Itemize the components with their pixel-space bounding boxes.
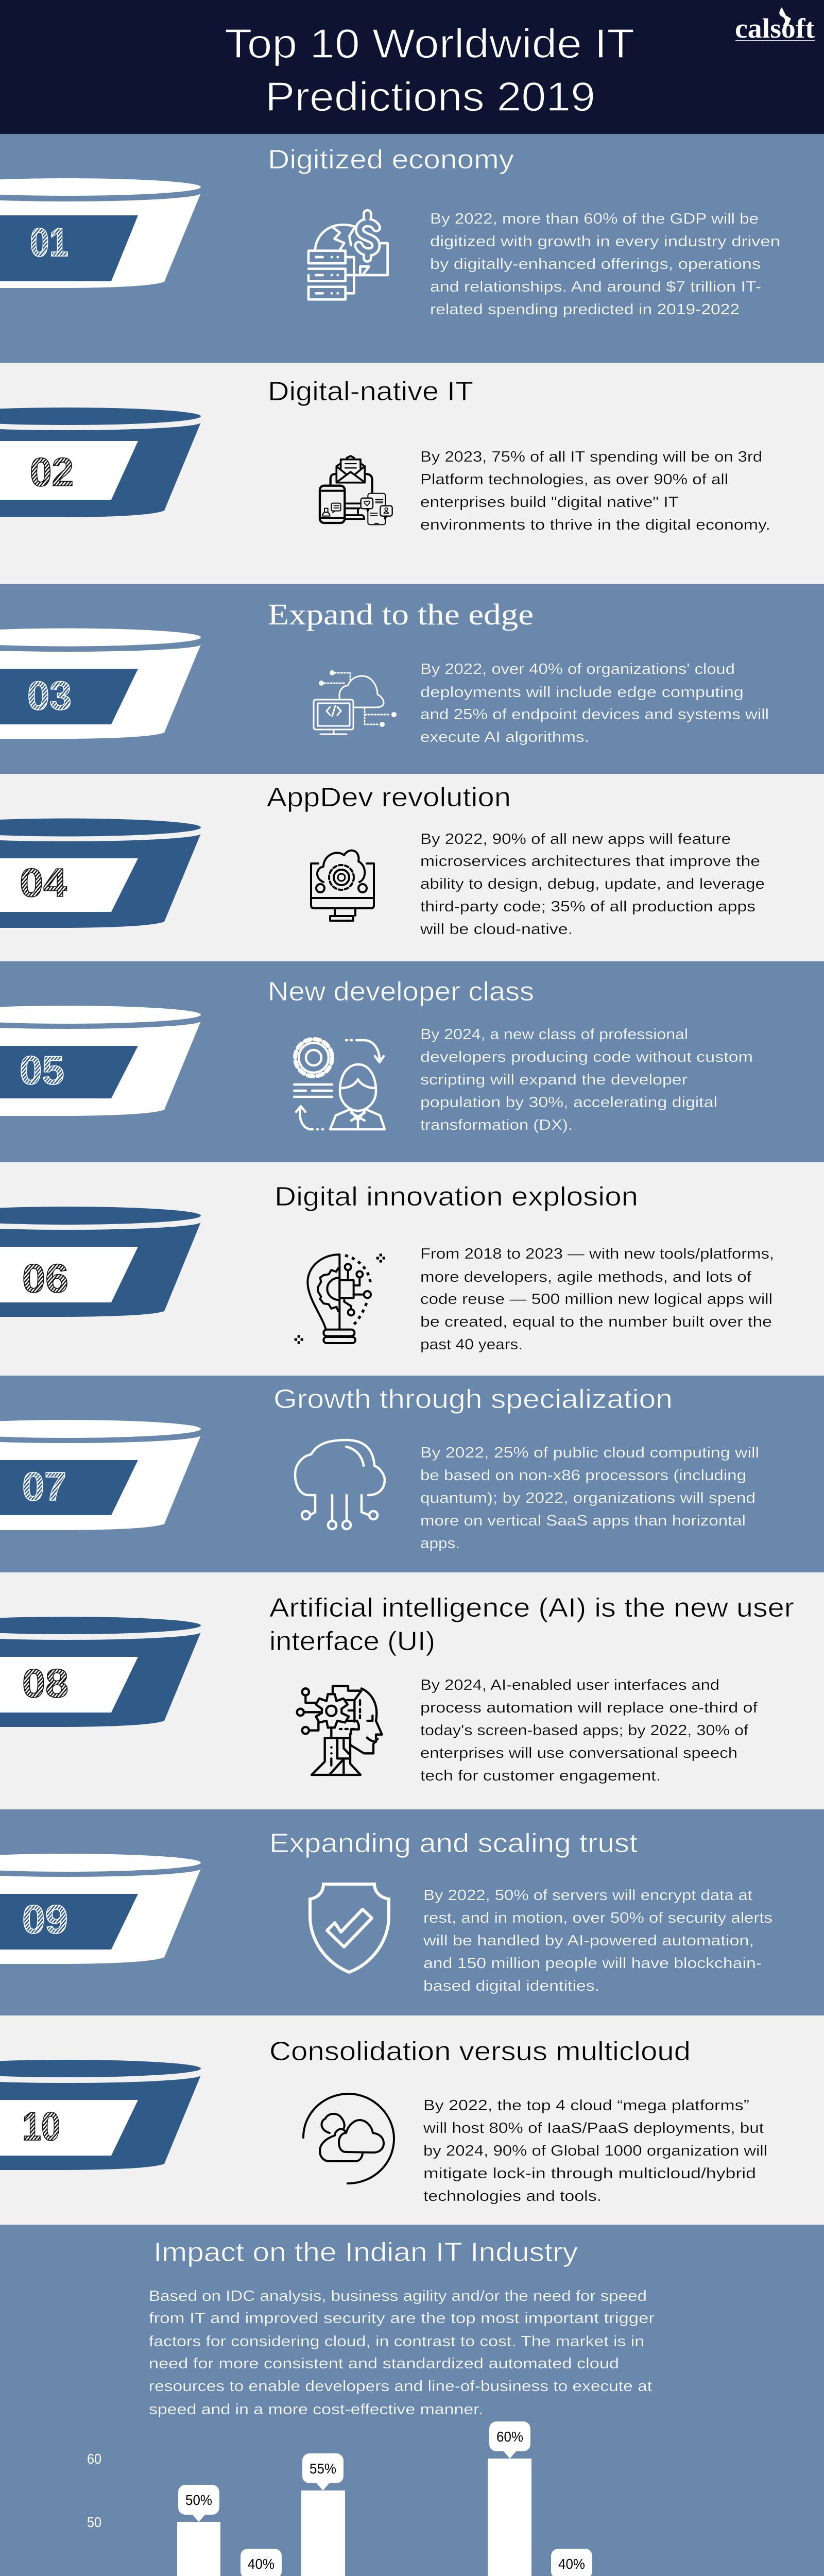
panel: 05 new developer class xyxy=(0,961,824,1162)
body text xyxy=(420,1026,753,1133)
heading: Expand to the edge xyxy=(268,598,534,631)
body text: By 2024, AI-enabled user interfaces and xyxy=(420,1677,719,1693)
body text: will be cloud-native. xyxy=(420,921,573,938)
body text: rest, and in motion, over 50% of security alerts xyxy=(423,1910,772,1926)
number bucket 10: 10 xyxy=(22,2104,60,2149)
body text xyxy=(420,1445,759,1552)
number bucket 04 xyxy=(0,818,201,928)
body text: process automation will replace one-third of xyxy=(420,1700,758,1716)
panel: 04 appdev revolution xyxy=(0,774,824,961)
logo: calsoft: calsoft xyxy=(735,13,815,44)
body text: third-party code; 35% of all production apps xyxy=(420,899,756,915)
body text: By 2022, 90% of all new apps will feature xyxy=(420,831,731,848)
heading: Artificial intelligence (AI) is the new user xyxy=(269,1593,794,1623)
body text: By 2022, 50% of servers will encrypt data at xyxy=(423,1887,752,1904)
body text: factors for considering cloud, in contrast to cost. The market is in xyxy=(149,2333,644,2350)
panel: 10 consolidation versus multicloud xyxy=(0,2015,824,2225)
body text: By 2022, over 40% of organizations' cloud xyxy=(420,661,735,677)
body text: need for more consistent and standardized automated cloud xyxy=(149,2355,619,2372)
body text xyxy=(149,2288,655,2418)
body text: technologies and tools. xyxy=(423,2188,602,2205)
panel: 09 expanding and scaling trust xyxy=(0,1809,824,2015)
body text: apps. xyxy=(420,1535,460,1552)
body text: ability to design, debug, update, and leverage xyxy=(420,876,765,892)
body text: scripting will expand the developer xyxy=(420,1072,688,1088)
number bucket 05 xyxy=(0,1006,201,1116)
bar: 55% xyxy=(301,2453,345,2576)
heading: Impact on the Indian IT Industry xyxy=(153,2238,578,2267)
heading: Expanding and scaling trust xyxy=(269,1828,638,1858)
icon: cloud network xyxy=(295,1440,385,1529)
icon: orbiting clouds xyxy=(303,2094,394,2183)
heading: Digital-native IT xyxy=(268,377,473,406)
body text: and 25% of endpoint devices and systems will xyxy=(420,706,769,723)
y axis labels: 50 xyxy=(87,2514,101,2530)
panel: 07 growth through specialization xyxy=(0,1376,824,1572)
bar: 40% xyxy=(550,2549,594,2576)
y axis labels: 60 xyxy=(87,2451,101,2467)
number bucket 04: 04 xyxy=(20,860,67,905)
body text: microservices architectures that improve the xyxy=(420,853,760,870)
body text: be based on non-x86 processors (including xyxy=(420,1467,746,1484)
icon: shield with check xyxy=(310,1884,389,1972)
y axis labels xyxy=(87,2451,101,2576)
number bucket 08 xyxy=(0,1617,201,1727)
body text: and relationships. And around $7 trillion IT- xyxy=(430,279,761,295)
body text: speed and in a more cost-effective manner. xyxy=(149,2401,483,2418)
body text: developers producing code without custom xyxy=(420,1049,753,1065)
icon: AI head with gear xyxy=(297,1686,382,1775)
bar: 60% xyxy=(488,2421,531,2576)
bar chart xyxy=(87,2421,730,2576)
bar: 40%: 40% xyxy=(558,2556,585,2572)
icon: digital light bulb xyxy=(295,1253,385,1344)
title xyxy=(225,21,634,120)
bar: 55%: 55% xyxy=(310,2461,336,2477)
body text xyxy=(420,831,765,938)
body text xyxy=(420,661,769,745)
body text: resources to enable developers and line-of-business to execute at xyxy=(149,2378,652,2395)
heading: Digitized economy xyxy=(268,145,514,175)
number bucket 06 xyxy=(0,1207,201,1317)
heading: Consolidation versus multicloud xyxy=(269,2037,691,2066)
number bucket 01: 01 xyxy=(30,219,68,265)
body text xyxy=(420,449,770,533)
body text: By 2022, the top 4 cloud “mega platforms” xyxy=(423,2097,749,2114)
body text: code reuse — 500 million new logical apps will xyxy=(420,1291,772,1308)
body text: past 40 years. xyxy=(420,1336,523,1353)
number bucket 06: 06 xyxy=(22,1256,68,1301)
body text xyxy=(423,2097,767,2205)
body text: deployments will include edge computing xyxy=(420,684,744,701)
heading: Digital innovation explosion xyxy=(274,1182,638,1212)
bar: 50%: 50% xyxy=(185,2492,212,2508)
title: Predictions 2019 xyxy=(265,74,595,120)
icon: edge cloud monitor xyxy=(314,670,397,734)
panel: 02 digital-native IT xyxy=(0,363,824,584)
body text: and 150 million people will have blockchain- xyxy=(423,1955,762,1972)
body text xyxy=(420,1246,774,1353)
number bucket 01 xyxy=(0,178,201,288)
number bucket 02 xyxy=(0,408,201,517)
body text: will host 80% of IaaS/PaaS deployments, but xyxy=(423,2120,764,2137)
bar: 40%: 40% xyxy=(248,2556,274,2572)
body text: quantum); by 2022, organizations will spend xyxy=(420,1490,756,1506)
bar: 50% xyxy=(177,2485,220,2576)
body text: By 2024, a new class of professional xyxy=(420,1026,688,1043)
number bucket 03: 03 xyxy=(27,673,72,718)
number bucket 07 xyxy=(0,1420,201,1530)
body text: By 2023, 75% of all IT spending will be on 3rd xyxy=(420,449,762,465)
bar: 60%: 60% xyxy=(496,2429,523,2445)
number bucket 08: 08 xyxy=(22,1660,68,1706)
number bucket 07: 07 xyxy=(22,1464,66,1509)
number bucket 02: 02 xyxy=(30,449,74,495)
heading: New developer class xyxy=(268,977,534,1007)
body text: will be handled by AI-powered automation, xyxy=(423,1933,754,1949)
body text: enterprises build "digital native" IT xyxy=(420,494,679,511)
body text: by digitally-enhanced offerings, operations xyxy=(430,256,761,273)
heading: Growth through specialization xyxy=(273,1384,673,1414)
icon: cloud gear monitor xyxy=(311,851,374,921)
body text xyxy=(420,1677,758,1784)
body text: By 2022, 25% of public cloud computing will xyxy=(420,1445,759,1461)
heading: AppDev revolution xyxy=(267,783,511,812)
body text: by 2024, 90% of Global 1000 organization will xyxy=(423,2143,767,2159)
number bucket 09: 09 xyxy=(22,1896,68,1942)
title: Top 10 Worldwide IT xyxy=(225,21,634,66)
panel: 08 artificial intelligence xyxy=(0,1572,824,1809)
body text: environments to thrive in the digital economy. xyxy=(420,517,770,533)
body text: population by 30%, accelerating digital xyxy=(420,1094,717,1111)
body text: today's screen-based apps; by 2022, 30% of xyxy=(420,1722,749,1739)
bar: 40% xyxy=(239,2549,283,2576)
panel: 06 digital innovation explosion xyxy=(0,1162,824,1376)
number bucket 09 xyxy=(0,1854,201,1964)
number bucket 05: 05 xyxy=(20,1047,64,1093)
body text: From 2018 to 2023 — with new tools/platforms, xyxy=(420,1246,774,1262)
icon: globe dollar servers xyxy=(308,214,388,299)
body text: be created, equal to the number built over the xyxy=(420,1314,772,1330)
heading xyxy=(269,1593,794,1656)
body text: enterprises will use conversational speech xyxy=(420,1745,737,1761)
body text: from IT and improved security are the top most important trigger xyxy=(149,2310,655,2327)
body text: mitigate lock-in through multicloud/hybrid xyxy=(423,2165,756,2182)
body text: transformation (DX). xyxy=(420,1117,573,1133)
body text: tech for customer engagement. xyxy=(420,1768,661,1784)
body text: digitized with growth in every industry driven xyxy=(430,233,780,250)
number bucket 03 xyxy=(0,629,201,739)
body text: execute AI algorithms. xyxy=(420,729,589,745)
header banner xyxy=(0,0,824,134)
heading: interface (UI) xyxy=(269,1626,435,1656)
icon: messaging devices xyxy=(320,456,392,524)
body text: Platform technologies, as over 90% of all xyxy=(420,471,728,488)
body text: more developers, agile methods, and lots of xyxy=(420,1269,752,1285)
panel: 01 digitized economy xyxy=(0,134,824,363)
panel: impact on the Indian IT industry xyxy=(0,2225,824,2576)
body text: based digital identities. xyxy=(423,1978,599,1994)
icon: developer and gear xyxy=(294,1039,385,1129)
body text: related spending predicted in 2019-2022 xyxy=(430,301,740,318)
panel: 03 expand to the edge xyxy=(0,584,824,774)
body text: Based on IDC analysis, business agility and/or the need for speed xyxy=(149,2288,647,2304)
number bucket 10 xyxy=(0,2060,201,2170)
body text: more on vertical SaaS apps than horizontal xyxy=(420,1513,746,1529)
body text: By 2022, more than 60% of the GDP will be xyxy=(430,211,759,227)
body text xyxy=(430,211,780,318)
body text xyxy=(423,1887,772,1994)
